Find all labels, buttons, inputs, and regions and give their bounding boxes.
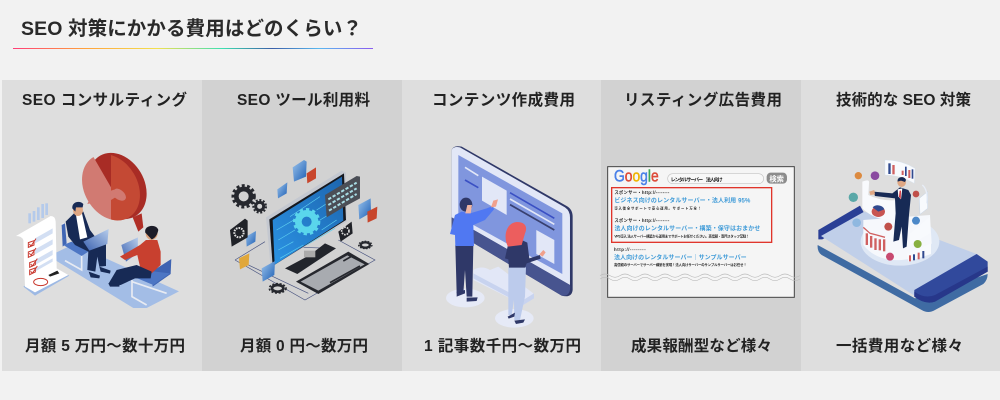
illustration: search results mockup: ビジネス向けのレンタルサーバー・法人利用 95% <box>614 197 751 205</box>
title: SEO 対策にかかる費用はどのくらい？ <box>21 18 362 40</box>
price: SEO consulting: 月額 5 万円〜数十万円 <box>25 337 185 355</box>
illustration: computer and gears <box>230 160 377 300</box>
illustration: search results mockup: 検索 <box>769 175 784 184</box>
panel: SEO consulting <box>2 80 202 371</box>
heading: content creation: コンテンツ作成費用 <box>432 90 575 109</box>
panel: SEO tools <box>202 80 402 371</box>
illustration: search results mockup: 法人向けのレンタルサーバー・構築・保守はおまかせ <box>614 225 760 233</box>
heading: listing ads: リスティング広告費用 <box>624 90 782 109</box>
illustration: consultation <box>16 142 179 308</box>
illustration: search results mockup: http://-------- <box>614 247 646 252</box>
price: listing ads: 成果報酬型など様々 <box>631 336 772 355</box>
illustration: search results mockup <box>600 167 800 297</box>
illustration: search results mockup: スポンサー・http://-------- <box>614 189 670 196</box>
illustration: businessman on smartphone <box>818 160 988 312</box>
panel: technical SEO <box>801 80 1000 371</box>
illustration: people at large screen <box>446 146 573 328</box>
heading: technical SEO: 技術的な SEO 対策 <box>836 90 971 109</box>
heading: SEO tools: SEO ツール利用料 <box>237 91 370 109</box>
panel: listing ads <box>600 80 801 371</box>
logo: Google: Google <box>614 167 659 186</box>
price: SEO tools: 月額 0 円〜数万円 <box>240 337 368 355</box>
price: technical SEO: 一括費用など様々 <box>836 336 963 355</box>
price: content creation: 1 記事数千円〜数万円 <box>424 336 581 355</box>
illustration: search results mockup: 導入後全サポートで安心運用。サポート万全！ <box>614 205 701 210</box>
speech bubble <box>82 152 147 232</box>
illustration: search results mockup: レンタルサーバー 法人向け <box>671 176 723 183</box>
panel: content creation <box>402 80 601 371</box>
illustration: search results mockup: スポンサー・http://-------- <box>614 217 670 224</box>
illustration: search results mockup: VPS導入 法人サーバー構築から運用までサポートお任せください。高信頼・専門スタッフ常駐！ <box>614 233 749 238</box>
heading: SEO consulting: SEO コンサルティング <box>22 90 187 109</box>
illustration: search results mockup: 法人向けのレンタルサーバー｜サンプルサーバー <box>614 254 747 262</box>
illustration: search results mockup: 高信頼のサーバーでサーバー構築を実現！法人向けサーバーのサンプルサーバーはお任せ！ <box>614 262 747 267</box>
